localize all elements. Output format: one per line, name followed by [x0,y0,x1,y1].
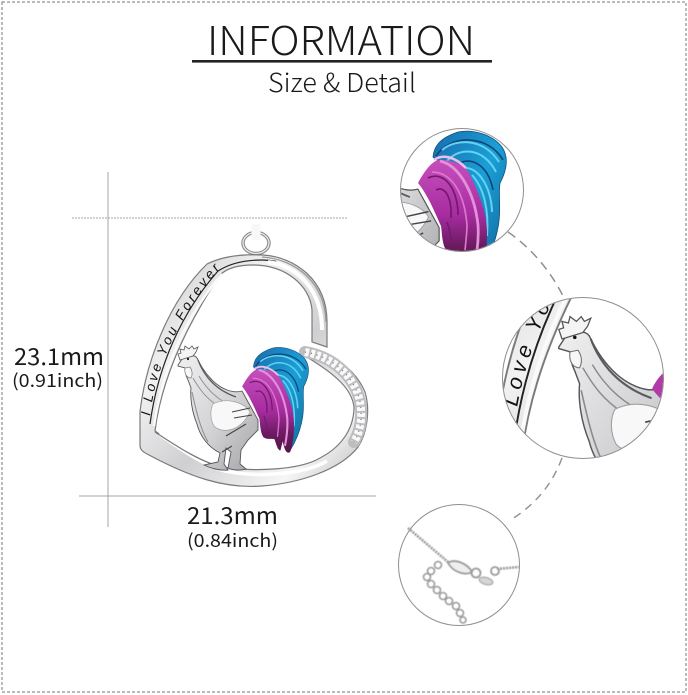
height dimension label: 23.1mm [14,338,104,372]
dashed connector: rooster to chain [509,458,562,521]
title underline [192,60,492,63]
rooster figure [178,346,308,470]
heart pendant [138,255,368,486]
title: INFORMATION [207,9,475,67]
dashed connector: tail to rooster [508,232,563,296]
width dimension label: (0.84inch) [187,527,278,553]
chain and lobster clasp [408,528,519,623]
detail circle: rooster and engraving [502,297,664,459]
detail circle: chain clasp [398,504,520,626]
detail circle: tail feathers [400,128,524,252]
height dimension label: (0.91inch) [12,367,103,393]
dimension guide lines [72,172,376,527]
width dimension label [187,497,278,553]
subtitle: Size & Detail [268,63,416,100]
height dimension label [12,338,104,393]
pendant bail ring [243,224,269,254]
width dimension label: 21.3mm [187,497,278,531]
